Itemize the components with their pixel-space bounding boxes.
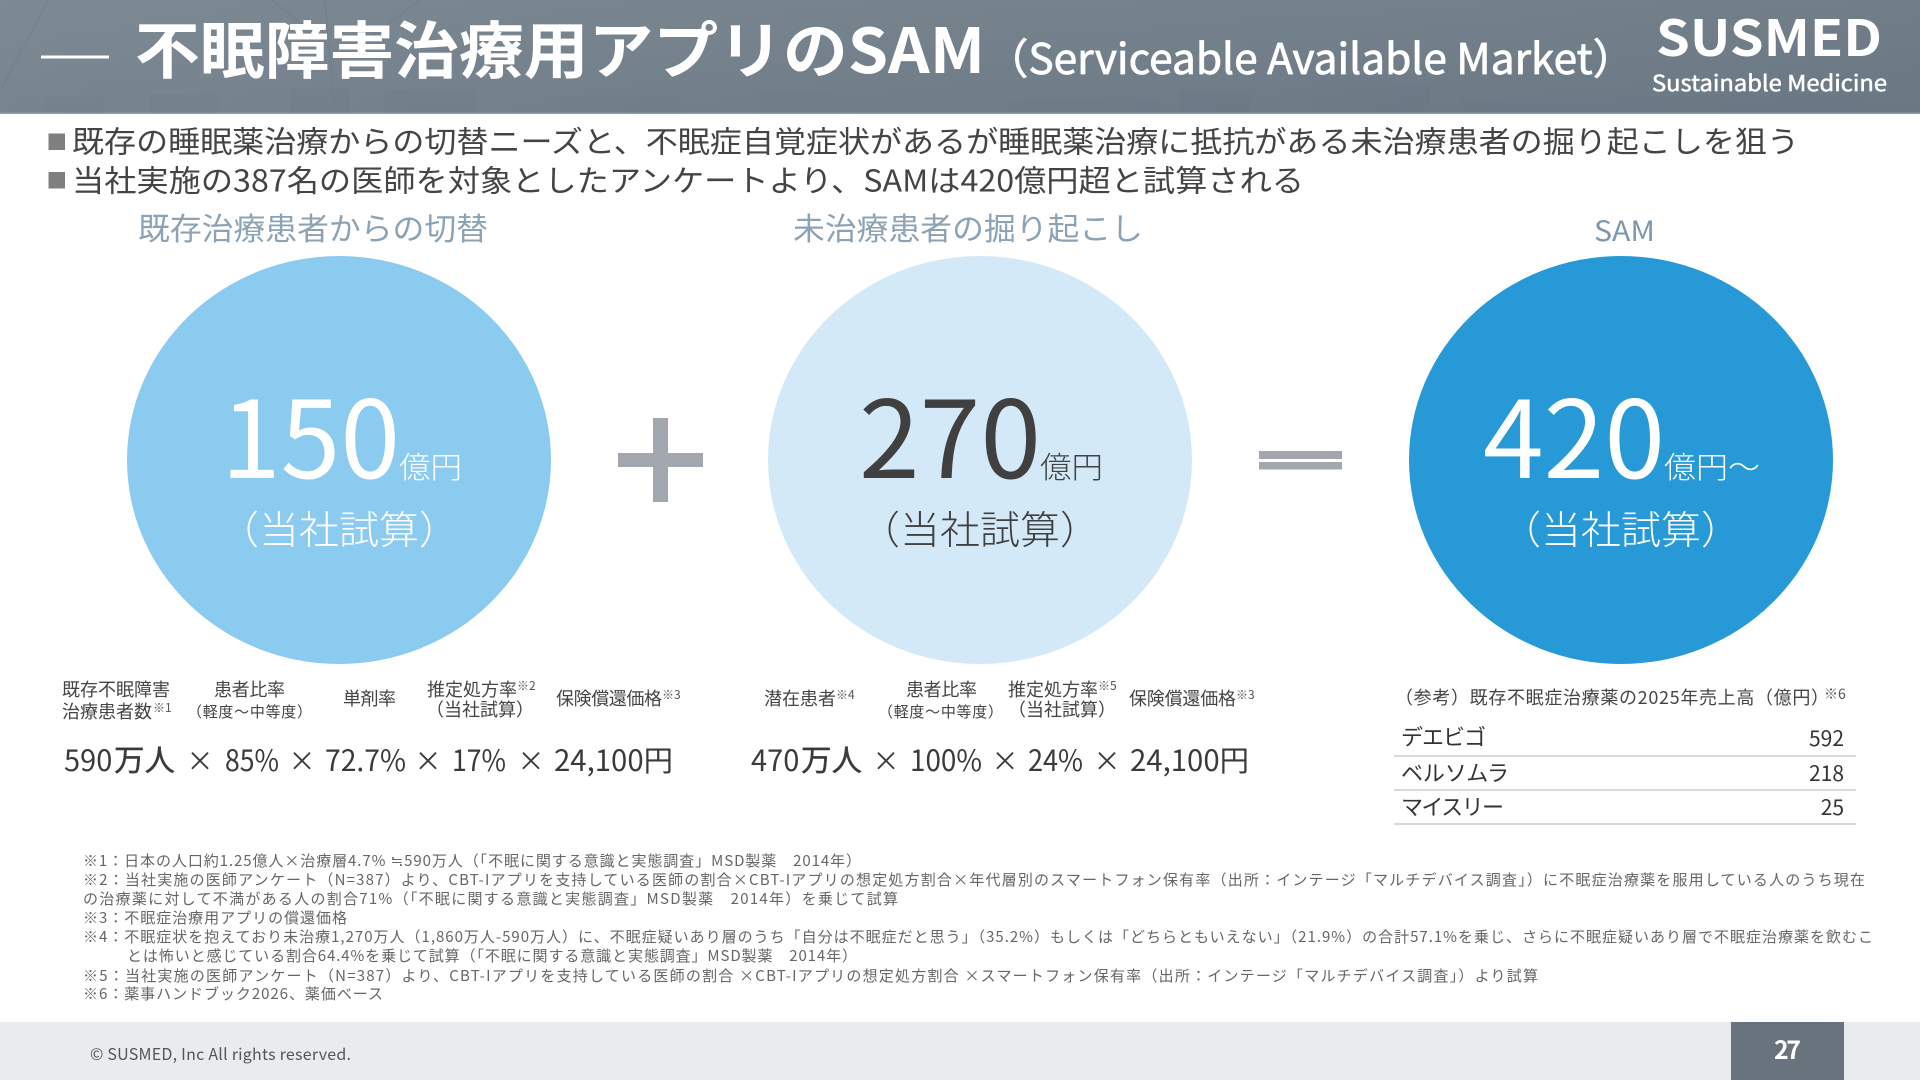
sales table: 218 — [1809, 758, 1844, 788]
labels: untreated formula: （当社試算） — [1008, 696, 1116, 722]
labels: switching formula: 既存不眠障害 — [62, 676, 170, 702]
bullet points — [48, 118, 1799, 200]
sales table — [1394, 684, 1856, 825]
labels: switching formula: （軽度～中等度） — [187, 701, 312, 722]
values: untreated formula: 100% — [910, 738, 982, 780]
footnotes: とは怖いと感じている割合64.4%を乗じて試算（「不眠に関する意識と実態調査」MSD製薬 2014年） — [127, 945, 857, 966]
values: untreated formula: 24% — [1028, 738, 1083, 780]
values: switching formula: × — [518, 740, 544, 779]
circle: 150 — [127, 256, 551, 664]
plus sign — [618, 418, 703, 502]
circle: 420: 420 — [1483, 354, 1665, 509]
bullet points: 既存の睡眠薬治療からの切替ニーズと、不眠症自覚症状があるが睡眠薬治療に抵抗がある未治療患者の掘り起こしを狙う — [72, 118, 1799, 162]
labels: untreated formula: 潜在患者 — [764, 685, 836, 711]
sales table: 25 — [1821, 792, 1844, 822]
values: switching formula: 72.7% — [325, 738, 406, 780]
circle: 420: （当社試算） — [1501, 500, 1741, 556]
values: untreated formula: × — [1094, 740, 1120, 779]
labels: switching formula: 推定処方率 — [427, 676, 517, 702]
circle: 150: 億円 — [399, 443, 462, 487]
labels: untreated formula: 保険償還価格 — [1129, 685, 1236, 711]
circle: 270: 270 — [859, 354, 1041, 509]
header band — [0, 0, 1920, 114]
values: switching formula — [64, 736, 673, 780]
footnotes: の治療薬に対して不満がある人の割合71%（「不眠に関する意識と実態調査」MSD製薬 2014年）を乗じて試算 — [83, 888, 898, 909]
footnotes — [83, 850, 1873, 1004]
footnotes: ※2：当社実施の医師アンケート（N=387）より、CBT-Iアプリを支持している医師の割合×CBT-Iアプリの想定処方割合×年代層別のスマートフォン保有率（出所：インテージ「マルチデバイス調査」）に不眠症治療薬を服用している人のうち現在 — [83, 869, 1865, 890]
sales table: デエビゴ — [1401, 720, 1486, 752]
values: switching formula: × — [186, 740, 214, 779]
circle: 150: 150 — [221, 354, 400, 509]
values: switching formula: × — [414, 740, 442, 779]
values: untreated formula: × — [872, 740, 900, 779]
footnotes: ※5：当社実施の医師アンケート（N=387）より、CBT-Iアプリを支持している医師の割合 ×CBT-Iアプリの想定処方割合 ×スマートフォン保有率（出所：インテージ「マルチデバイス調査」）より試算 — [83, 965, 1538, 986]
labels: switching formula: ※1 — [153, 699, 172, 716]
sales table: ※6 — [1824, 684, 1846, 704]
circle: 270: 億円 — [1040, 443, 1103, 487]
logo: SUSMED: Sustainable Medicine — [1652, 66, 1887, 98]
circle: 270 — [768, 256, 1192, 664]
heading: untreated: 未治療患者の掘り起こし — [793, 204, 1143, 249]
labels: switching formula: ※2 — [517, 677, 536, 694]
labels: untreated formula — [764, 676, 1255, 722]
labels: untreated formula: （軽度～中等度） — [878, 701, 1003, 722]
sales table: マイスリー — [1401, 790, 1504, 822]
labels: untreated formula: ※4 — [836, 686, 855, 703]
values: untreated formula: 470 — [751, 738, 799, 780]
values: untreated formula — [751, 736, 1249, 780]
page number — [1731, 1022, 1844, 1080]
footer bar — [0, 1022, 1920, 1080]
title: 不眠障害治療用アプリのSAM — [135, 1, 985, 91]
values: untreated formula: × — [992, 740, 1018, 779]
labels: switching formula: 単剤率 — [343, 685, 396, 711]
footnotes: ※1：日本の人口約1.25億人×治療層4.7% ≒590万人（「不眠に関する意識と実態調査」MSD製薬 2014年） — [83, 850, 861, 871]
circle: 270: （当社試算） — [860, 500, 1100, 556]
sales table: ベルソムラ — [1401, 756, 1509, 788]
labels: switching formula: 治療患者数 — [62, 698, 152, 724]
footnotes: ※3：不眠症治療用アプリの償還価格 — [83, 907, 347, 928]
bullet points: 当社実施の387名の医師を対象としたアンケートより、SAMは420億円超と試算される — [72, 156, 1304, 200]
labels: untreated formula: ※5 — [1098, 677, 1117, 694]
logo: SUSMED: SUSMED — [1656, 0, 1882, 71]
labels: switching formula: 患者比率 — [214, 676, 285, 702]
footer bar: © SUSMED, Inc All rights reserved. — [90, 1041, 351, 1065]
subtitle: （Serviceable Available Market） — [986, 26, 1635, 87]
values: switching formula: 万人 — [114, 736, 175, 780]
labels: untreated formula: 患者比率 — [906, 676, 977, 702]
values: switching formula: × — [288, 740, 316, 779]
values: switching formula: 590 — [64, 738, 112, 780]
labels: switching formula: 保険償還価格 — [556, 685, 662, 711]
circle: 420 — [1409, 256, 1833, 664]
values: switching formula: 24,100円 — [554, 738, 673, 780]
circle: 150: （当社試算） — [219, 500, 459, 556]
values: untreated formula: 万人 — [801, 736, 862, 780]
labels: untreated formula: 推定処方率 — [1008, 676, 1098, 702]
logo: SUSMED — [1652, 0, 1887, 98]
values: switching formula: 85% — [225, 738, 279, 780]
footnotes: ※6：薬事ハンドブック2026、薬価ベース — [83, 983, 383, 1004]
labels: untreated formula: ※3 — [1236, 686, 1255, 703]
labels: switching formula: （当社試算） — [426, 696, 534, 722]
labels: switching formula: ※3 — [662, 686, 681, 703]
equals sign — [1259, 451, 1342, 470]
sales table: 592 — [1809, 723, 1844, 753]
page number: 27 — [1774, 1031, 1801, 1067]
circle: 420: 億円～ — [1664, 443, 1760, 487]
heading: SAM: SAM — [1594, 210, 1655, 250]
sales table: （参考）既存不眠症治療薬の2025年売上高（億円） — [1395, 684, 1829, 710]
values: switching formula: 17% — [452, 738, 506, 780]
labels: switching formula — [62, 676, 681, 724]
footnotes: ※4：不眠症状を抱えており未治療1,270万人（1,860万人-590万人）に、不眠症疑いあり層のうち「自分は不眠症だと思う」（35.2%）もしくは「どちらともいえない」（21.9%）の合計57.1%を乗じ、さらに不眠症疑いあり層で不眠症治療薬を飲むこ — [83, 926, 1873, 947]
values: untreated formula: 24,100円 — [1130, 738, 1249, 780]
heading: switching: 既存治療患者からの切替 — [138, 204, 488, 249]
